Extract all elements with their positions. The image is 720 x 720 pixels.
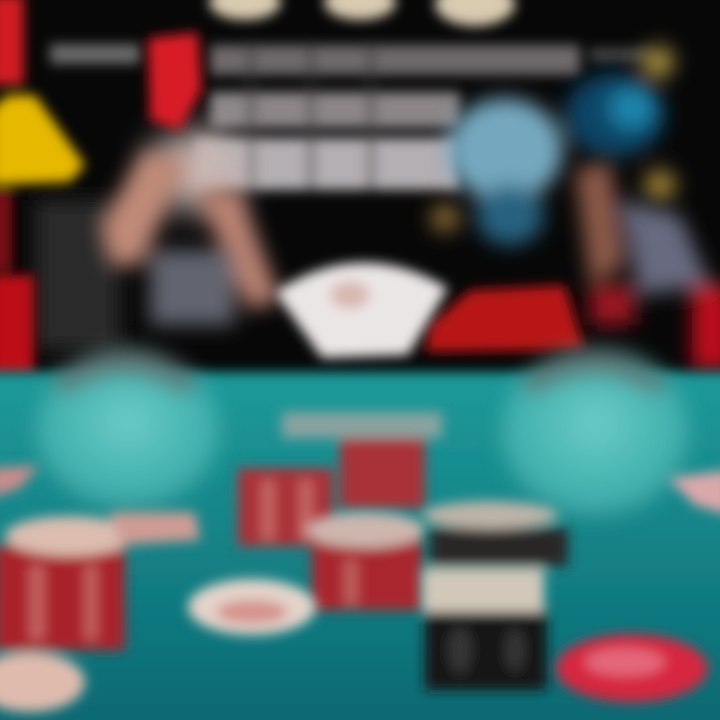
player left: arms and shirt	[100, 150, 280, 325]
left chip pile	[0, 512, 200, 712]
cards at table edges	[0, 465, 720, 515]
fanned playing cards	[275, 262, 448, 358]
poker table felt	[0, 372, 720, 720]
glass dome left	[36, 348, 220, 508]
red chips lower right	[556, 634, 708, 702]
left red lamp and stripe	[0, 0, 85, 375]
central chip tower top	[238, 412, 442, 546]
player right	[575, 160, 720, 370]
flat white chip	[188, 579, 316, 635]
blue splash	[431, 46, 676, 245]
red chip stack centre	[305, 512, 425, 610]
glass dome right	[501, 348, 689, 516]
background: upper room	[35, 200, 120, 350]
title banner: blurred lettering	[50, 40, 650, 190]
red flag	[148, 32, 202, 130]
red table backing	[425, 285, 585, 352]
ceiling lights	[209, 0, 515, 26]
haze around raised arms	[150, 130, 240, 210]
black and white chip stack	[422, 501, 568, 690]
